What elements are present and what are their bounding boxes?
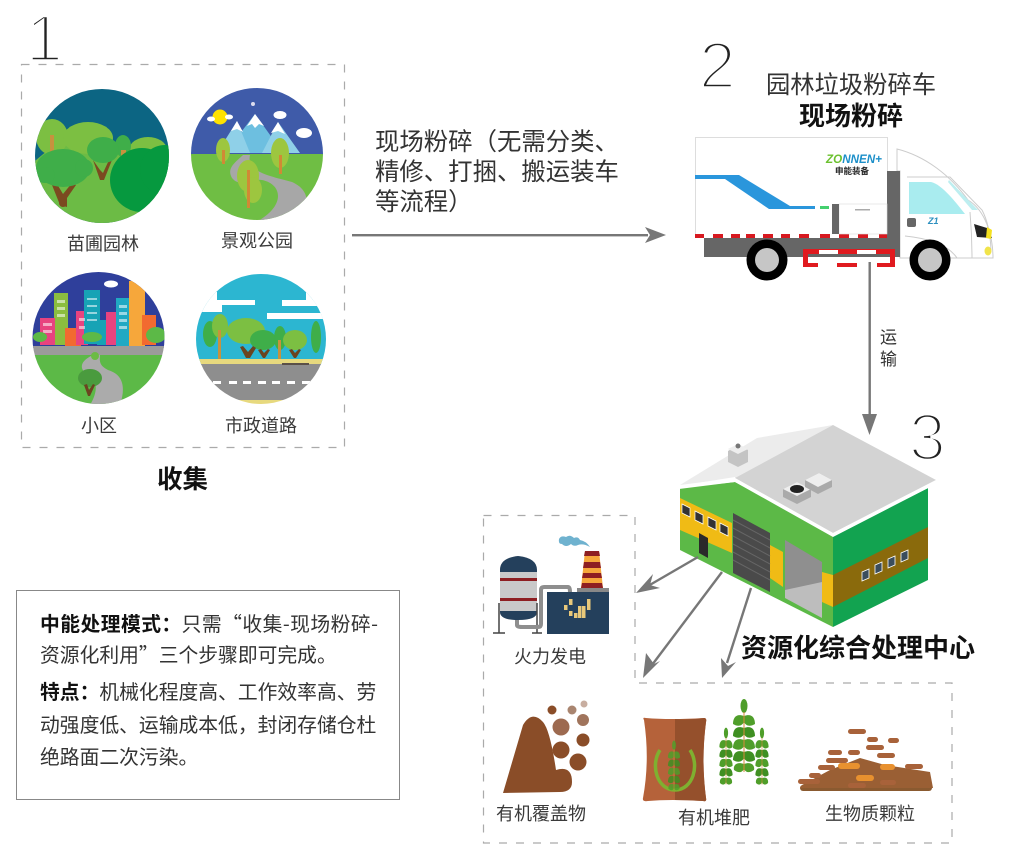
icon: municipal road circle	[196, 274, 326, 404]
heading: truck: 现场粉碎	[799, 101, 903, 131]
panel: description box: 特点：机械化程度高、工作效率高、劳	[40, 676, 376, 705]
panel: collection sources	[22, 64, 344, 448]
panel: outputs dashed frame	[484, 516, 952, 843]
roof vent	[728, 444, 748, 467]
panel: description box: 绝路面二次污染。	[40, 741, 198, 770]
label: 小区	[81, 416, 117, 436]
icon: crusher truck: Z1	[927, 216, 939, 226]
panel: description box: 中能处理模式：只需“收集-现场粉碎-	[40, 608, 378, 637]
arrow: collection to truck	[352, 227, 666, 243]
label: 火力发电	[514, 647, 586, 667]
label: transport: 运	[880, 328, 897, 347]
icon: nursery forest circle	[35, 89, 169, 223]
logo: 申能装备	[835, 166, 870, 176]
text: on-site crushing note: 等流程）	[375, 189, 473, 216]
icon: crusher truck	[695, 138, 993, 280]
text: on-site crushing note: 精修、打捆、搬运装车	[375, 159, 619, 186]
panel: description box	[16, 590, 400, 800]
icon: organic mulch	[503, 700, 590, 793]
label: 苗圃园林	[67, 234, 139, 254]
label: transport: 输	[880, 350, 897, 369]
label: 有机覆盖物	[496, 804, 586, 824]
heading: truck: 园林垃圾粉碎车	[766, 72, 936, 99]
icon: compost bag and wheat	[643, 699, 769, 801]
arrow: to compost	[721, 588, 751, 678]
text: on-site crushing note: 现场粉碎（无需分类、	[375, 129, 619, 156]
heading: collect: 收集	[157, 466, 208, 494]
step number 1: 1	[26, 1, 63, 75]
icon: processing center building	[679, 425, 936, 627]
icon: biomass pellets	[798, 729, 933, 791]
label: 景观公园	[221, 231, 293, 251]
panel: description box: 动强度低、运输成本低，封闭存储仓杜	[40, 709, 376, 738]
arrow: to power	[636, 557, 698, 593]
logo	[825, 154, 882, 176]
text: on-site crushing note	[375, 129, 619, 216]
label: 生物质颗粒	[825, 804, 915, 824]
heading: processing center: 资源化综合处理中心	[741, 633, 975, 663]
icon: landscape park circle	[190, 85, 325, 224]
heading: truck	[766, 72, 936, 131]
label: 市政道路	[225, 416, 297, 436]
arrow: truck to center	[862, 262, 877, 435]
roof ac units	[783, 473, 832, 504]
logo: ZONNEN+	[825, 154, 882, 166]
arrow: to mulch	[643, 572, 722, 678]
label: 有机堆肥	[678, 808, 750, 828]
label: transport	[880, 328, 897, 369]
icon: residential circle	[30, 270, 170, 405]
icon: thermal power	[493, 536, 609, 634]
panel: description box: 资源化利用”三个步骤即可完成。	[40, 639, 337, 668]
step number 3: 3	[909, 400, 946, 474]
step number 2: 2	[699, 28, 736, 102]
